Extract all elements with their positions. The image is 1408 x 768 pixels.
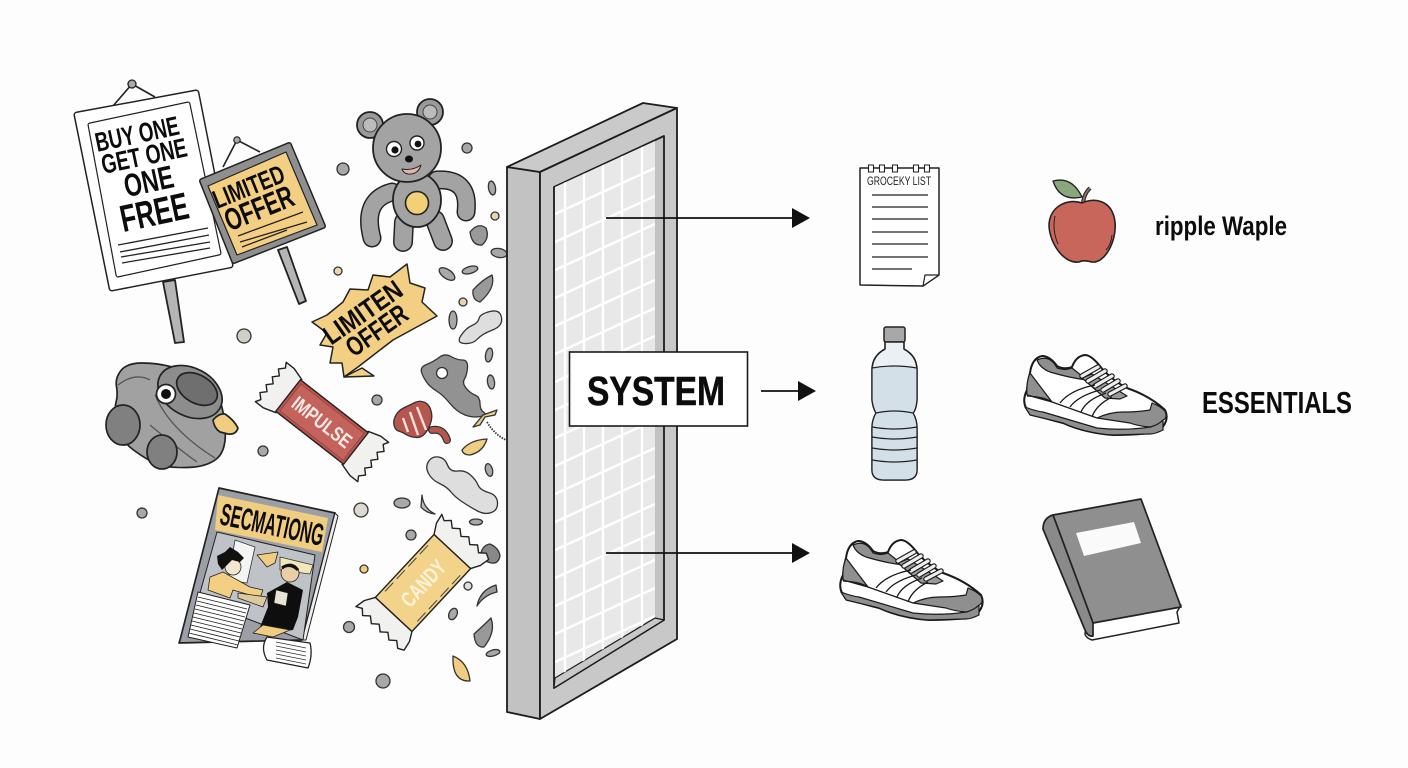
filter mesh xyxy=(555,146,655,673)
debris: scattered particles xyxy=(137,143,508,688)
callout: limiten offer burst xyxy=(312,264,437,377)
label: ripple waple: ripple Waple xyxy=(1155,211,1287,241)
filter frame xyxy=(507,100,677,719)
icon: water bottle xyxy=(872,327,917,480)
icon: red candy bow xyxy=(394,401,447,440)
icon: sneaker top xyxy=(1024,355,1167,435)
icon: teddy bear toy xyxy=(357,99,466,242)
icon: candy bar: CANDY xyxy=(395,555,451,612)
icon: toy car robot xyxy=(106,355,238,469)
sign: buy one get one free: GET ONE xyxy=(98,132,190,180)
label: system xyxy=(570,352,748,426)
sign: buy one get one free xyxy=(77,80,230,343)
sign: limited offer: OFFER xyxy=(219,179,299,238)
icon: impulse candy bar xyxy=(254,361,390,483)
arrow: top xyxy=(606,208,810,228)
sign: buy one get one free: FREE xyxy=(116,186,193,241)
sign: buy one get one free: ONE xyxy=(121,158,177,204)
icon: book xyxy=(1043,499,1181,640)
sign: buy one get one free: BUY ONE xyxy=(92,111,182,158)
callout: limiten offer burst: OFFER xyxy=(340,299,414,363)
magazine title: SECMATIONG xyxy=(217,497,327,553)
icon: candy bar xyxy=(355,513,491,652)
icon: magazine xyxy=(179,488,338,668)
label: essentials: ESSENTIALS xyxy=(1202,385,1352,420)
icon: grocery list: GROCEKY LIST xyxy=(867,174,931,188)
icon: grocery list xyxy=(860,165,939,286)
sign: limited offer: LIMITED xyxy=(208,159,289,215)
callout: limiten offer burst: LIMITEN xyxy=(317,275,408,351)
sign: limited offer xyxy=(202,137,323,304)
icon: sneaker bottom xyxy=(840,540,983,620)
label: system: SYSTEM xyxy=(587,368,725,414)
arrow: bottom xyxy=(606,543,810,563)
icon: apple xyxy=(1049,180,1115,262)
arrow: middle xyxy=(761,381,816,401)
icon: impulse candy bar: IMPULSE xyxy=(287,393,356,453)
